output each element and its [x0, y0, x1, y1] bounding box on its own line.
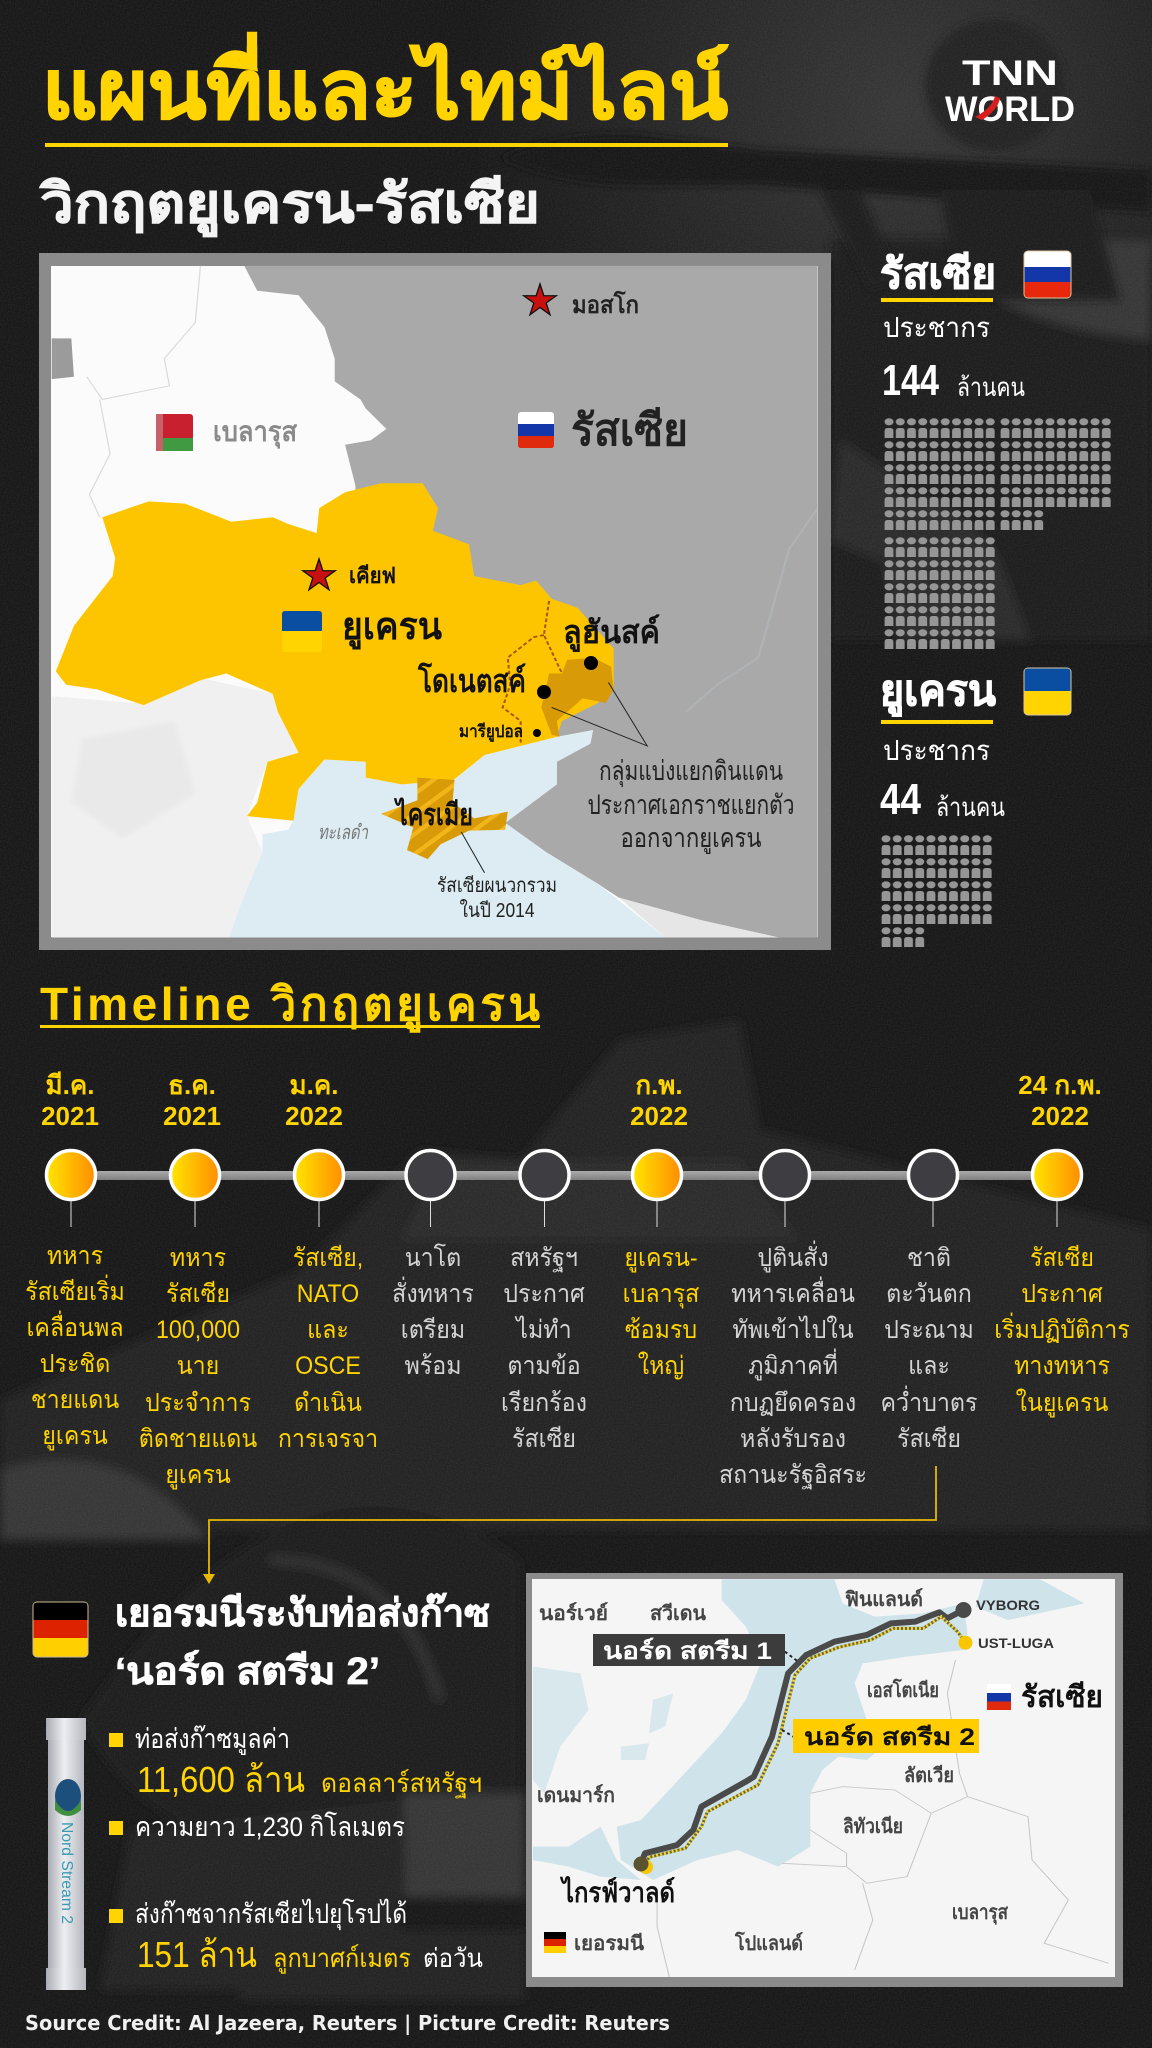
panel: Nord Stream map: ลิทัวเนีย — [843, 1815, 903, 1838]
timeline event: March 2021: ทหาร — [47, 1242, 103, 1270]
panel: Ukraine map: เคียฟ — [349, 563, 396, 588]
list: Nord Stream facts: ส่งก๊าซจากรัสเซียไปยุโรปได้ — [135, 1899, 407, 1931]
timeline event: December 2021: ติดชายแดน — [139, 1425, 257, 1453]
panel: Nord Stream map: เบลารุส — [952, 1902, 1009, 1925]
panel: Nord Stream map: เยอรมนี — [574, 1932, 644, 1955]
icon: Nord Stream 2 pipe — [46, 1718, 86, 1990]
panel: Ukraine population: 44 — [880, 775, 921, 824]
panel: Ukraine population: ยูเครน — [880, 667, 996, 717]
heading: Germany suspends Nord Stream 2: เยอรมนีระงับท่อส่งก๊าซ — [115, 1593, 490, 1635]
source credit: Source Credit: Al Jazeera, Reuters | Picture Credit: Reuters — [25, 2011, 670, 2035]
timeline event: USA — [501, 1244, 587, 1453]
callout: separatist regions: กลุ่มแบ่งแยกดินแดน — [599, 756, 783, 788]
panel: Nord Stream map: เดนมาร์ก — [537, 1784, 615, 1807]
arrow: sanctions to Nord Stream — [203, 1466, 936, 1584]
panel: Nord Stream map: สวีเดน — [650, 1602, 706, 1625]
timeline event: February 2022: ใหญ่ — [638, 1351, 684, 1380]
list: Nord Stream facts: ความยาว 1,230 กิโลเมตร — [135, 1812, 405, 1842]
timeline event: USA: ประกาศ — [503, 1280, 585, 1308]
timeline event: USA: รัสเซีย — [512, 1425, 576, 1453]
timeline event: the West — [880, 1244, 978, 1453]
panel: Nord Stream map: ลัตเวีย — [904, 1764, 954, 1787]
timeline event: Putin — [719, 1240, 867, 1489]
timeline event: Putin: ทัพเข้าไปใน — [732, 1315, 854, 1344]
pictogram: 44 million people — [881, 835, 994, 950]
panel: Ukraine map: เบลารุส — [213, 416, 298, 449]
timeline dates: 2022 — [1031, 1101, 1089, 1131]
timeline event: the West: ชาติ — [907, 1244, 951, 1272]
timeline heading: Timeline วิกฤตยูเครน — [40, 978, 541, 1033]
timeline dates: ธ.ค. — [168, 1070, 216, 1100]
panel: Ukraine map: ยูเครน — [342, 606, 442, 650]
callout: separatist regions — [588, 756, 794, 854]
heading: Germany suspends Nord Stream 2: ‘นอร์ด สตรีม 2’ — [115, 1650, 380, 1693]
panel: Nord Stream map: นอร์เวย์ — [539, 1602, 608, 1625]
icon: Ukraine flag large — [1024, 668, 1071, 715]
panel: Ukraine map: โดเนตสค์ — [417, 662, 526, 699]
list: Nord Stream facts — [109, 1724, 483, 1975]
subtitle: วิกฤตยูเครน-รัสเซีย — [39, 174, 540, 237]
map regions — [52, 266, 818, 938]
timeline event: USA: เรียกร้อง — [501, 1389, 587, 1417]
panel: Ukraine population: ล้านคน — [936, 792, 1005, 822]
callout: Crimea annexed: รัสเซียผนวกรวม — [437, 875, 557, 897]
timeline event: 24 February 2022 — [994, 1244, 1130, 1418]
timeline event: March 2021: ชายแดน — [31, 1386, 119, 1414]
timeline event: Putin: สถานะรัฐอิสระ — [719, 1461, 867, 1489]
panel: Nord Stream map: เอสโตเนีย — [867, 1678, 939, 1702]
panel: Russia population — [880, 250, 1112, 652]
timeline event: January 2022: NATO — [297, 1280, 359, 1308]
panel: Ukraine map: ทะเลดำ — [318, 822, 369, 844]
timeline event: NATO: เตรียม — [401, 1316, 465, 1344]
icon: Belarus flag — [156, 414, 193, 451]
timeline dates: 2022 — [285, 1101, 343, 1131]
timeline event: NATO: นาโต — [405, 1243, 461, 1272]
timeline event: January 2022: OSCE — [295, 1352, 361, 1380]
panel: Nord Stream map: ฟินแลนด์ — [845, 1588, 923, 1611]
timeline event: USA: สหรัฐฯ — [510, 1244, 578, 1272]
list: Nord Stream facts: 11,600 ล้าน — [137, 1759, 305, 1800]
timeline axis — [46, 1150, 1082, 1227]
heading: Germany suspends Nord Stream 2 — [115, 1593, 490, 1693]
timeline event: Putin: ทหารเคลื่อน — [731, 1276, 855, 1308]
title underline — [45, 143, 728, 147]
timeline event: January 2022: และ — [307, 1316, 349, 1344]
timeline event: March 2021: รัสเซียเริ่ม — [25, 1274, 125, 1306]
timeline event: Putin: หลังรับรอง — [740, 1425, 846, 1453]
timeline event: March 2021: เคลื่อนพล — [26, 1310, 124, 1342]
panel: Ukraine map: ลูฮันสค์ — [563, 614, 660, 653]
callout: Crimea annexed — [437, 875, 557, 922]
list: Nord Stream facts: ดอลลาร์สหรัฐฯ — [321, 1768, 482, 1799]
timeline event: NATO: สั่งทหาร — [392, 1276, 474, 1308]
panel: Ukraine population — [880, 667, 1071, 950]
timeline dates: 2022 — [630, 1101, 688, 1131]
timeline event: USA: ไม่ทำ — [514, 1315, 572, 1344]
timeline event: January 2022: ดำเนิน — [294, 1389, 362, 1417]
pictogram: 144 million people — [884, 418, 1112, 652]
timeline dates: 24 ก.พ. — [1018, 1070, 1102, 1100]
panel: Nord Stream map: VYBORG — [976, 1597, 1040, 1613]
timeline event: the West: ประณาม — [884, 1316, 974, 1344]
icon: Germany flag small — [544, 1932, 566, 1953]
timeline dates: 2021 — [41, 1101, 99, 1131]
timeline event: December 2021: ประจำการ — [145, 1389, 251, 1417]
logo: TNN World: WORLD — [945, 90, 1075, 129]
timeline event: NATO — [392, 1243, 474, 1380]
timeline event: December 2021: 100,000 — [156, 1316, 240, 1344]
timeline event: USA: ตามข้อ — [507, 1352, 581, 1380]
callout: separatist regions: ออกจากยูเครน — [620, 823, 762, 854]
timeline event: 24 February 2022: รัสเซีย — [1030, 1244, 1094, 1272]
timeline dates: ม.ค. — [290, 1070, 338, 1100]
timeline event: February 2022: เบลารุส — [623, 1280, 700, 1309]
timeline dates: ก.พ. — [635, 1070, 683, 1100]
panel: Nord Stream map: UST-LUGA — [978, 1635, 1054, 1651]
panel: Russia population: 144 — [882, 356, 939, 405]
timeline event: 24 February 2022: เริ่มปฏิบัติการ — [994, 1312, 1130, 1344]
timeline event: March 2021 — [25, 1242, 125, 1451]
title: แผนที่และไทม์ไลน์ — [42, 32, 729, 136]
icon: Russia flag — [518, 412, 554, 448]
icon: Moscow star — [524, 284, 556, 315]
timeline event: Putin: กบฏยึดครอง — [730, 1389, 856, 1417]
icon: Ukraine flag — [282, 611, 322, 652]
timeline event: the West: คว่ำบาตร — [880, 1385, 978, 1417]
list: Nord Stream facts: ต่อวัน — [423, 1943, 483, 1973]
icon: Russia flag large — [1024, 251, 1071, 298]
list: Nord Stream facts: 151 ล้าน — [137, 1934, 257, 1975]
logo: TNN World: TNN — [962, 54, 1058, 93]
timeline event: 24 February 2022: ประกาศ — [1021, 1280, 1103, 1308]
callout: separatist regions: ประกาศเอกราชแยกตัว — [588, 790, 794, 820]
logo: TNN World — [945, 54, 1075, 129]
timeline event: December 2021 — [139, 1244, 257, 1490]
panel: Nord Stream map — [526, 1573, 1123, 1987]
timeline event: January 2022: การเจรจา — [278, 1425, 378, 1453]
panel: Nord Stream map: รัสเซีย — [1021, 1681, 1103, 1714]
panel: Ukraine population: ประชากร — [883, 735, 990, 766]
timeline event: 24 February 2022: ในยูเครน — [1016, 1388, 1108, 1418]
milestone markers — [46, 1150, 1082, 1200]
timeline event: January 2022: รัสเซีย, — [293, 1244, 363, 1272]
map: Baltic sea and routes — [533, 1579, 1109, 1977]
timeline event: December 2021: นาย — [177, 1352, 219, 1380]
timeline event: December 2021: รัสเซีย — [166, 1280, 230, 1308]
panel: Nord Stream map: ไกรฟ์วาลด์ — [559, 1876, 675, 1908]
timeline event: the West: ตะวันตก — [886, 1280, 972, 1308]
list: Nord Stream facts: ท่อส่งก๊าซมูลค่า — [135, 1724, 290, 1755]
icon: Germany flag — [33, 1602, 88, 1657]
timeline dates — [41, 1070, 1102, 1131]
timeline event: February 2022 — [623, 1244, 700, 1380]
icon: Nord Stream 2 pipe: Nord Stream 2 — [58, 1822, 75, 1924]
timeline event: the West: รัสเซีย — [897, 1425, 961, 1453]
panel: Russia population: ประชากร — [883, 312, 990, 343]
timeline event: December 2021: ทหาร — [170, 1244, 226, 1272]
panel: Ukraine map — [39, 253, 831, 950]
timeline event: December 2021: ยูเครน — [165, 1461, 231, 1490]
panel: Ukraine map: มอสโก — [572, 290, 639, 319]
callout: Crimea annexed: ในปี 2014 — [460, 899, 534, 922]
timeline event: February 2022: ยูเครน- — [624, 1244, 698, 1273]
timeline event: March 2021: ยูเครน — [42, 1422, 108, 1451]
label: Nord Stream 2: นอร์ด สตรีม 2 — [804, 1723, 975, 1751]
panel: Nord Stream map: โปแลนด์ — [734, 1931, 803, 1955]
label: Nord Stream 1: นอร์ด สตรีม 1 — [603, 1637, 772, 1665]
list: Nord Stream facts: ลูกบาศก์เมตร — [273, 1943, 411, 1974]
timeline dates: มี.ค. — [46, 1070, 94, 1100]
label: Nord Stream 1 — [593, 1634, 785, 1666]
timeline event: February 2022: ซ้อมรบ — [625, 1316, 697, 1344]
panel: Russia population: ล้านคน — [957, 372, 1025, 402]
timeline event: Putin: ภูมิภาคที่ — [748, 1348, 838, 1381]
label: Nord Stream 2 — [793, 1719, 979, 1753]
timeline event: the West: และ — [908, 1352, 950, 1380]
timeline event: NATO: พร้อม — [404, 1352, 462, 1380]
panel: Ukraine map: ไครเมีย — [394, 797, 473, 832]
timeline event: 24 February 2022: ทางทหาร — [1014, 1352, 1110, 1380]
timeline event: March 2021: ประชิด — [40, 1350, 110, 1378]
panel: Russia population: รัสเซีย — [880, 250, 996, 297]
icon: Russia flag small — [987, 1684, 1011, 1710]
icon: Kyiv star — [303, 559, 335, 590]
timeline event: Putin: ปูตินสั่ง — [757, 1240, 829, 1273]
panel: Ukraine map: มารียูปอล — [459, 721, 523, 743]
timeline dates: 2021 — [163, 1101, 221, 1131]
panel: Ukraine map: รัสเซีย — [571, 406, 688, 455]
timeline event: January 2022 — [278, 1244, 378, 1453]
